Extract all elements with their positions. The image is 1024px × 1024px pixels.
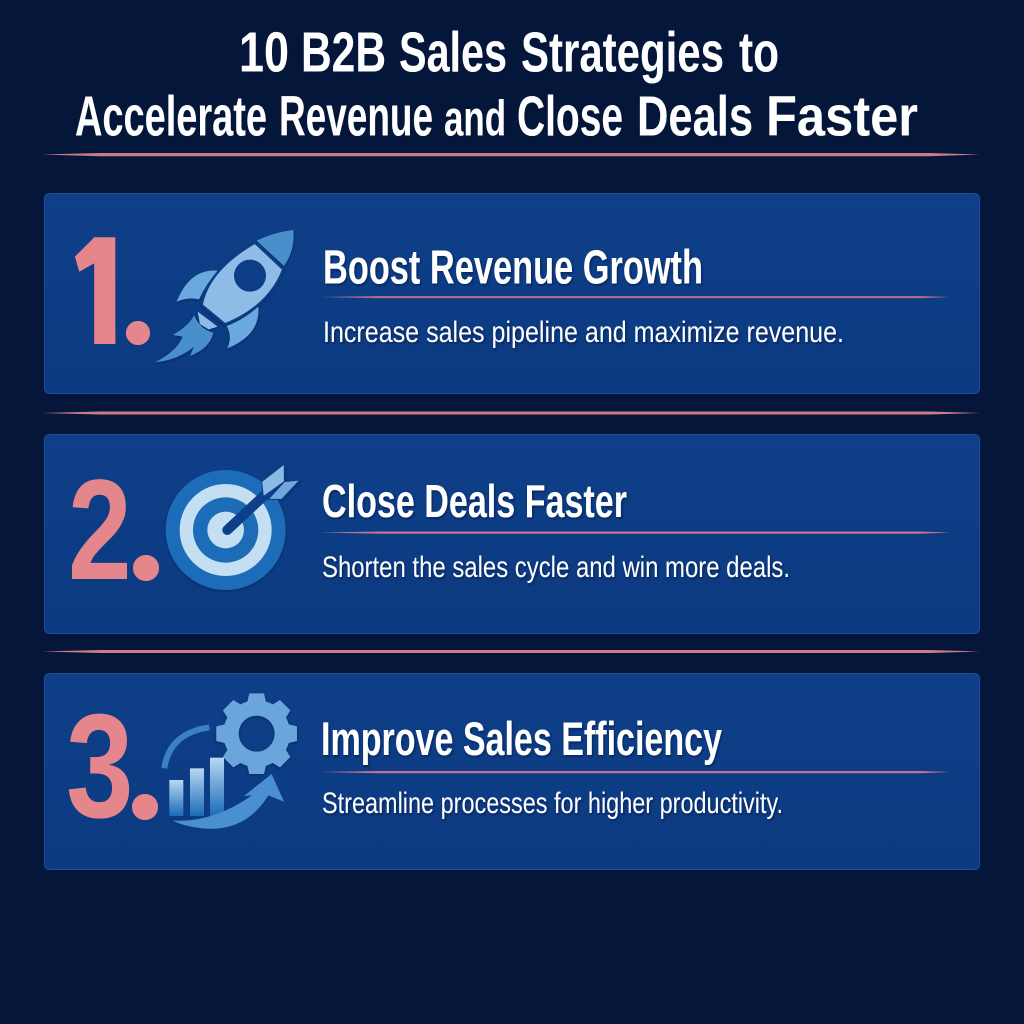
heading: Boost Revenue Growth <box>323 242 703 294</box>
icon: target <box>166 464 300 590</box>
panel: improve sales efficiency <box>44 673 980 870</box>
divider <box>42 650 980 653</box>
description: Shorten the sales cycle and win more deals. <box>322 551 790 584</box>
title: Strategies <box>521 20 724 84</box>
heading rule <box>320 532 950 534</box>
heading: Close Deals Faster <box>322 475 627 527</box>
divider <box>42 412 980 414</box>
panel: close deals faster <box>44 434 980 634</box>
icon: gear and growth chart <box>164 693 297 829</box>
title: Close <box>517 84 623 148</box>
heading: Improve Sales Efficiency <box>321 712 722 765</box>
title: Revenue <box>279 84 433 148</box>
gear <box>216 693 297 774</box>
title: Deals <box>637 84 753 148</box>
title: B2B <box>301 20 386 84</box>
number 1: 1 <box>59 208 142 376</box>
title: Accelerate <box>75 84 267 148</box>
title: and <box>444 90 506 146</box>
heading rule <box>320 771 950 773</box>
title <box>75 20 918 148</box>
number 3: . <box>119 650 172 862</box>
number 1 <box>75 237 150 345</box>
heading rule <box>320 296 950 298</box>
title divider <box>42 153 980 156</box>
number 3: 3 <box>66 682 133 849</box>
title: Faster <box>766 84 918 148</box>
icon: rocket <box>155 230 294 362</box>
number 2: . <box>120 411 173 623</box>
number 2 <box>72 479 159 581</box>
description: Streamline processes for higher productivity. <box>322 787 783 820</box>
panel: boost revenue growth <box>44 180 980 394</box>
description: Increase sales pipeline and maximize revenue. <box>323 316 844 349</box>
number 3 <box>68 714 158 820</box>
title: Sales <box>399 20 507 84</box>
number 2: 2 <box>68 451 132 610</box>
title: 10 <box>239 20 289 84</box>
title: to <box>739 20 779 84</box>
number 1: . <box>112 180 163 386</box>
